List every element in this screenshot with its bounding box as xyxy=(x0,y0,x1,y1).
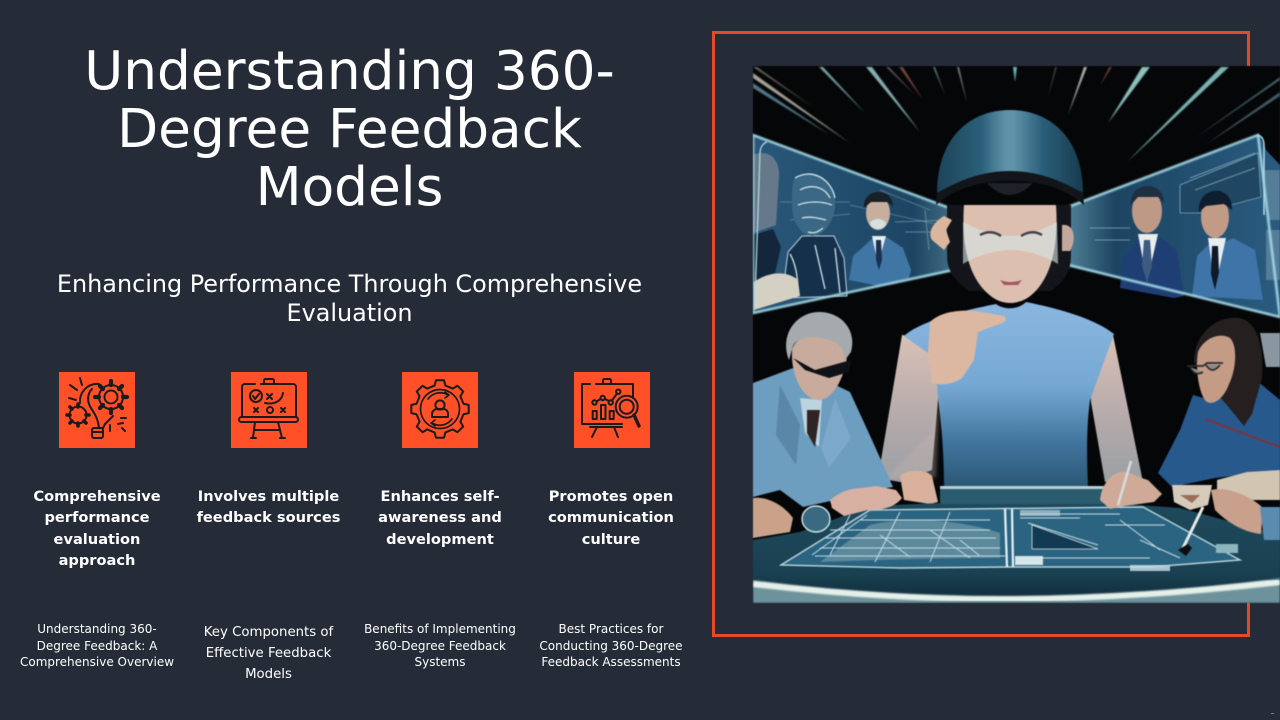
icon: gear with person xyxy=(402,372,478,448)
caption: benefits: Benefits of Implementing xyxy=(364,622,516,636)
helmet xyxy=(937,110,1083,193)
caption: benefits: 360-Degree Feedback xyxy=(374,638,506,652)
light streaks xyxy=(753,67,1280,162)
woman with helmet xyxy=(930,110,1084,303)
right holo panel xyxy=(1060,135,1280,317)
heading: self-awareness xyxy=(378,488,502,548)
title: Degree Feedback xyxy=(117,98,582,160)
caption: overview: Degree Feedback: A xyxy=(37,638,157,652)
heading: multiple sources: feedback sources xyxy=(197,509,340,526)
blueprint xyxy=(781,507,1240,571)
man on left xyxy=(753,312,902,538)
title: Understanding 360- xyxy=(84,40,615,102)
heading: self-awareness: awareness and xyxy=(378,509,502,526)
heading: comprehensive evaluation: Comprehensive xyxy=(33,488,161,505)
subtitle xyxy=(57,270,642,327)
heading: open communication: culture xyxy=(582,531,640,548)
caption: best practices: Best Practices for xyxy=(559,622,663,636)
woman on right xyxy=(1100,318,1280,556)
heading: comprehensive evaluation: performance xyxy=(44,509,150,526)
caption: best practices: Feedback Assessments xyxy=(541,655,681,669)
caption: key components: Key Components of xyxy=(204,625,333,640)
heading: multiple sources: Involves multiple xyxy=(198,488,339,505)
caption: overview xyxy=(20,622,174,669)
heading: comprehensive evaluation: approach xyxy=(59,552,135,569)
background xyxy=(753,66,1280,603)
title xyxy=(84,40,615,218)
heading: self-awareness: Enhances self- xyxy=(380,488,500,505)
heading: open communication: communication xyxy=(548,509,674,526)
icon: lightbulb with gears xyxy=(59,372,135,448)
caption: key components: Models xyxy=(245,667,292,682)
subtitle: Enhancing Performance Through Comprehensive xyxy=(57,270,642,298)
caption: benefits: Systems xyxy=(414,655,466,669)
heading: open communication: Promotes open xyxy=(549,488,673,505)
caption: overview: Comprehensive Overview xyxy=(20,655,174,669)
title: Models xyxy=(256,156,443,218)
icon: strategy board xyxy=(231,372,307,448)
subtitle: Evaluation xyxy=(286,299,413,327)
orange frame xyxy=(712,31,1250,637)
icon: presentation with chart and magnifier xyxy=(574,372,650,448)
caption: best practices: Conducting 360-Degree xyxy=(539,638,683,652)
woman torso and arms xyxy=(878,302,1143,504)
heading: open communication xyxy=(548,488,674,548)
caption: best practices xyxy=(539,622,683,669)
illustration: futuristic feedback meeting xyxy=(752,65,1280,604)
heading: self-awareness: development xyxy=(386,531,494,548)
heading: multiple sources xyxy=(196,488,340,526)
caption: overview: Understanding 360- xyxy=(37,622,157,636)
table rim xyxy=(753,578,1280,603)
heading: comprehensive evaluation xyxy=(33,488,161,569)
caption: key components: Effective Feedback xyxy=(206,646,331,661)
holographic table xyxy=(753,486,1280,603)
caption: benefits xyxy=(364,622,516,669)
caption: key components xyxy=(204,625,334,682)
left holo panel xyxy=(753,135,967,313)
heading: comprehensive evaluation: evaluation xyxy=(54,531,140,548)
